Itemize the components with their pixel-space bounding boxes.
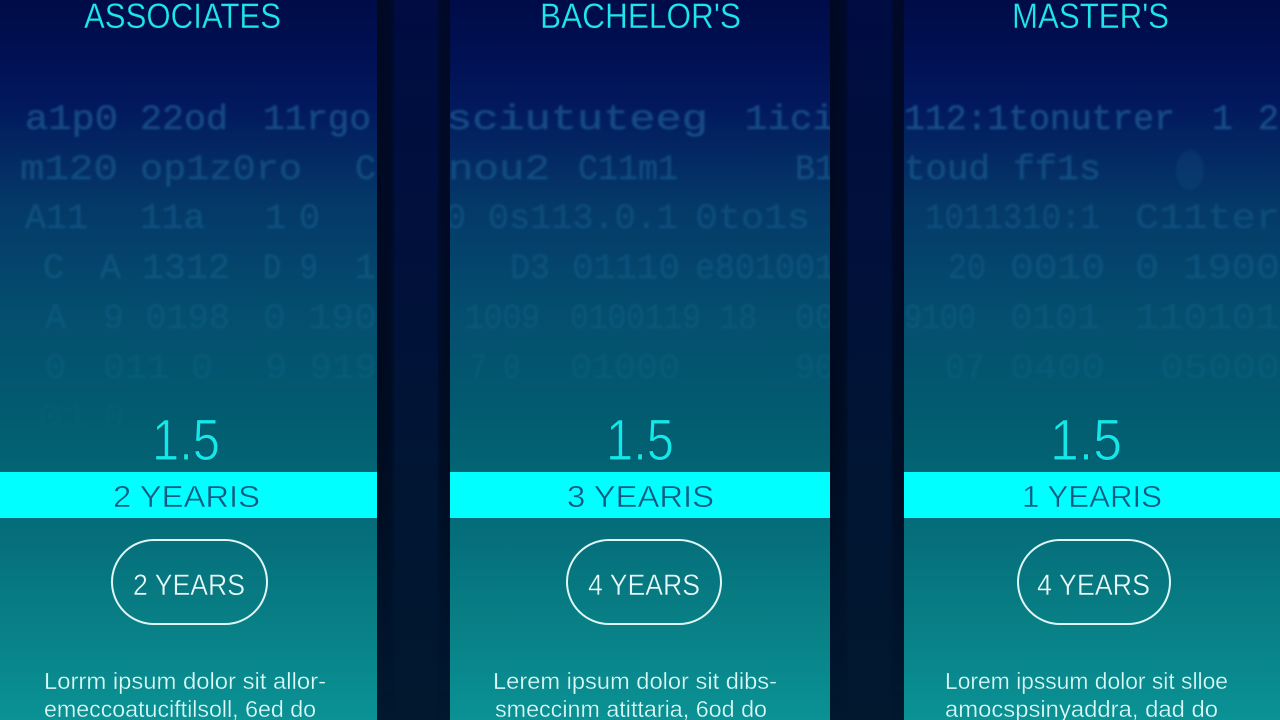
faded code texture: 1312 — [142, 249, 230, 289]
faded code texture: 01 — [38, 399, 88, 439]
faded code texture: 7 0 — [470, 349, 520, 389]
pill — [567, 540, 721, 624]
faded code texture: C11m1 — [578, 150, 678, 190]
faded code texture: 20 — [948, 249, 986, 289]
faded code texture: 11a — [140, 199, 205, 239]
faded code texture: 0s113.0.1 — [488, 199, 678, 239]
faded code texture: e801001 — [695, 249, 835, 289]
panel background — [450, 0, 830, 720]
faded code texture — [21, 102, 375, 328]
number: 1.5 — [152, 408, 220, 473]
faded code texture: 01000 — [570, 349, 680, 389]
faded code texture: a1p0 — [25, 100, 118, 140]
faded code texture: 0 — [445, 199, 466, 239]
number: 1.5 — [606, 408, 674, 473]
panel: associates — [0, 0, 377, 720]
faded code texture: 00 — [795, 299, 835, 339]
faded code texture: sciututeeg — [446, 100, 708, 140]
cyan band — [450, 472, 830, 518]
faded code texture: 0 1900 — [1135, 249, 1280, 289]
faded code texture: 0101 — [1010, 299, 1100, 339]
faded code texture — [906, 104, 1278, 328]
number: 1.5 — [1050, 408, 1122, 473]
faded code texture: 11rgo — [263, 100, 371, 140]
faded code texture: 05000 — [1160, 349, 1280, 389]
faded code texture: 0400 — [1010, 349, 1105, 389]
faded code texture: 07 — [945, 349, 985, 389]
faded code texture: 1009 — [465, 299, 540, 339]
faded code texture: 0 190 — [263, 299, 377, 339]
faded code texture: 011 0 — [103, 349, 213, 389]
cyan band — [0, 472, 377, 518]
panel background — [0, 0, 377, 720]
faded code texture: C — [43, 249, 64, 289]
faded code texture: 01110 — [572, 249, 680, 289]
faded code texture: 0 — [45, 349, 66, 389]
faded code texture: ff1s — [1013, 150, 1101, 190]
faded code texture: 1 — [355, 249, 376, 289]
faded code texture: 9 0198 — [103, 299, 230, 339]
body text — [493, 668, 777, 720]
faded code texture: op1z0ro — [140, 150, 302, 190]
faded code texture: 0010 — [1010, 249, 1105, 289]
faded code texture: 0to1s — [695, 199, 810, 239]
faded code texture: 0100119 18 — [570, 299, 757, 339]
panel: bachelor's — [445, 0, 835, 720]
faded code texture: 1011310:1 — [925, 199, 1100, 239]
faded code texture: C — [355, 150, 376, 190]
faded code texture: nou2 — [448, 150, 550, 190]
faded code texture: 1ici — [745, 100, 835, 140]
faded code texture: 90 — [795, 349, 835, 389]
body text — [945, 668, 1228, 720]
cyan band: 2 YEARIS — [113, 479, 260, 514]
body text: Lorrm ipsum dolor sit allor- — [44, 668, 326, 694]
cyan band: 3 YEARIS — [567, 479, 714, 514]
faded code texture: 112:1tonutrer — [904, 100, 1175, 140]
faded code texture: B1 — [795, 150, 835, 190]
faded code texture: 22od — [140, 100, 228, 140]
dark background gutters — [377, 0, 904, 720]
faded code texture: A — [45, 299, 66, 339]
faded code texture: m120 — [20, 150, 118, 190]
faded code texture: 9100 — [904, 299, 976, 339]
faded code texture: 110101 — [1135, 299, 1280, 339]
faded code texture: D3 — [510, 249, 550, 289]
body text: Lerem ipsum dolor sit dibs- — [493, 668, 777, 694]
cyan band — [904, 472, 1280, 518]
pill — [112, 540, 267, 624]
faded code texture: A11 — [25, 199, 88, 239]
panel: master's — [904, 0, 1280, 720]
pill: 4 YEARS — [588, 569, 700, 602]
faded code texture: A — [100, 249, 121, 289]
faded code texture: 2 — [1258, 100, 1279, 140]
faded code texture: 1 0 — [265, 199, 320, 239]
blurred blob — [1176, 150, 1204, 190]
faded code texture: 1 — [1212, 100, 1233, 140]
faded code texture: C11ter — [1135, 199, 1280, 239]
pill: 2 YEARS — [133, 569, 245, 602]
faded code texture: 9 919 — [265, 349, 377, 389]
pill — [1018, 540, 1170, 624]
faded code texture: toud — [904, 150, 990, 190]
cyan band: 1 YEARIS — [1022, 479, 1162, 514]
panel background — [904, 0, 1280, 720]
faded code texture: 0 — [103, 399, 124, 439]
body text: Lorem ipssum dolor sit slloe — [945, 668, 1228, 694]
body text — [44, 668, 326, 720]
faded code texture: D 9 — [263, 249, 318, 289]
faded code texture — [450, 102, 830, 328]
pill: 4 YEARS — [1037, 569, 1150, 602]
